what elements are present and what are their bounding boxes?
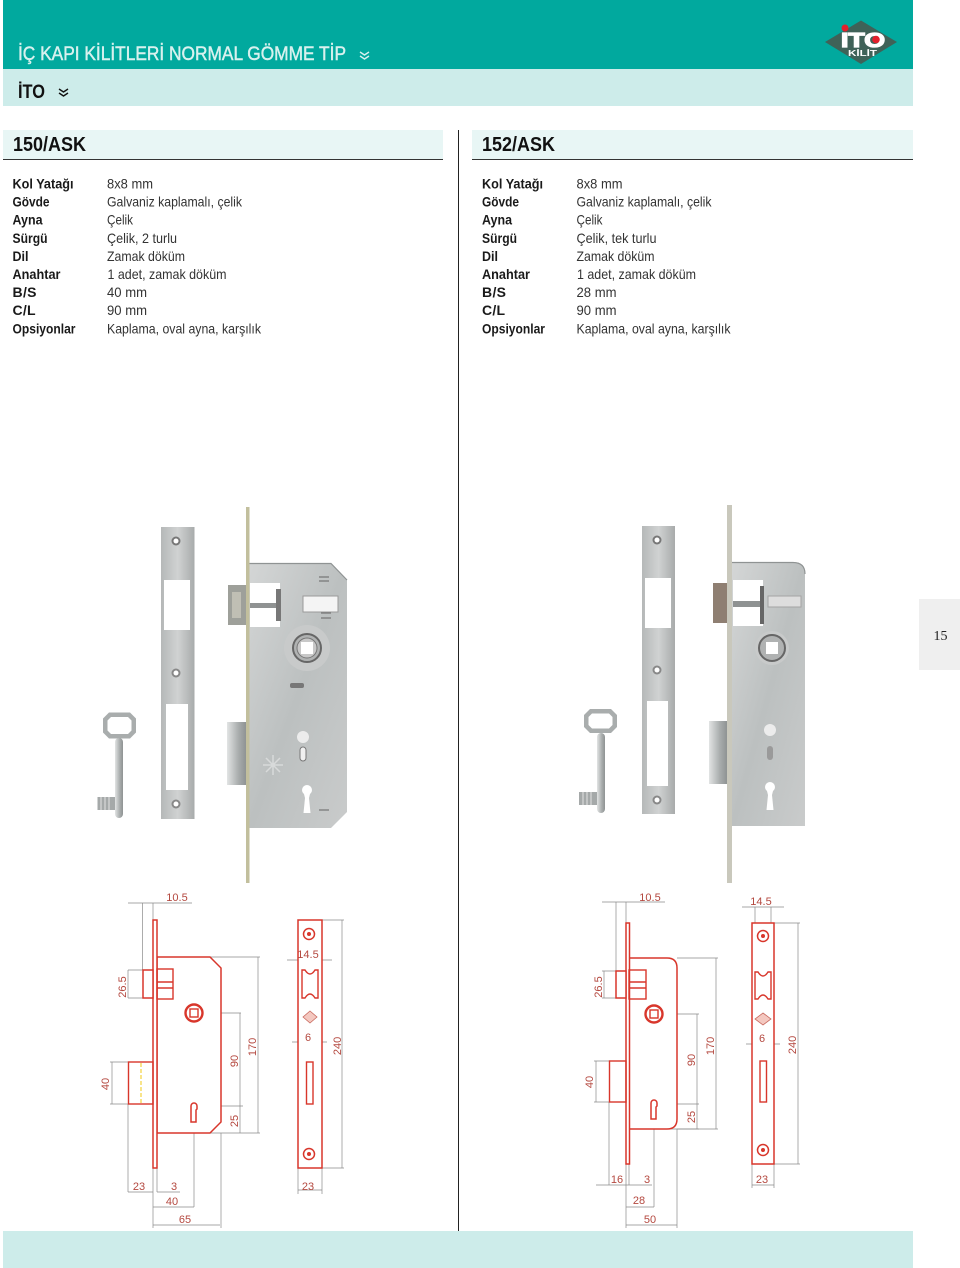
dimension labels (584, 892, 717, 1226)
technical drawing: 150/ASK strike plate: 6 (305, 1032, 311, 1044)
spec list: 150/ASK: Çelik, 2 turlu (107, 230, 177, 246)
page title: İÇ KAPI KİLİTLERİ NORMAL GÖMME TİP (18, 44, 346, 65)
photo: 152/ASK lock set (579, 505, 805, 883)
panel heading: 152/ASK: 152/ASK (482, 134, 555, 156)
dimension labels: 50 (644, 1214, 656, 1226)
spec list: 152/ASK: Dil (482, 248, 498, 264)
technical drawing: 152/ASK strike plate: 23 (756, 1174, 768, 1186)
spec list: 152/ASK: Sürgü (482, 230, 517, 246)
spec list: 150/ASK: Dil (12, 248, 28, 264)
panel heading: 150/ASK: 150/ASK (13, 134, 86, 156)
spec list: 152/ASK: Galvaniz kaplamalı, çelik (576, 194, 712, 210)
spec list: 152/ASK: Kol Yatağı (482, 176, 543, 192)
technical drawing: 150/ASK strike plate: 240 (332, 1037, 344, 1055)
dimension labels: 40 (100, 1078, 112, 1090)
spec list: 150/ASK: Çelik (107, 212, 134, 228)
header band (3, 0, 913, 69)
dimension labels: 40 (166, 1196, 178, 1208)
spec list: 152/ASK: B/S (482, 284, 506, 300)
spec list: 150/ASK: Kol Yatağı (12, 176, 74, 192)
spec list: 150/ASK: Gövde (12, 194, 50, 210)
spec list: 150/ASK: C/L (12, 302, 36, 318)
dimension lines (110, 903, 260, 1228)
spec list: 150/ASK: Ayna (12, 212, 43, 228)
dimension labels: 170 (247, 1038, 259, 1056)
dimension labels: 10.5 (166, 892, 188, 904)
spec list: 150/ASK: 1 adet, zamak döküm (108, 266, 226, 282)
lock outline (128, 920, 221, 1168)
technical drawing: 150/ASK strike plate: 23 (302, 1181, 314, 1193)
technical drawing: 152/ASK strike plate (742, 896, 800, 1188)
spec list: 152/ASK: 90 mm (576, 302, 616, 318)
spec list: 150/ASK: Anahtar (12, 266, 61, 282)
spec list: 150/ASK (12, 176, 262, 336)
logo: ITO Kilit: ITO (841, 30, 885, 52)
dimension labels: 3 (171, 1181, 177, 1193)
dimension labels: 23 (133, 1181, 145, 1193)
spec list: 150/ASK: Kaplama, oval ayna, karşılık (107, 320, 262, 336)
dimension labels: 3 (644, 1174, 650, 1186)
page number tab (919, 599, 960, 670)
dimension labels: 26.5 (593, 976, 605, 998)
dimension labels: 16 (611, 1174, 623, 1186)
technical drawing: 152/ASK lock (584, 892, 718, 1228)
dimension labels: 25 (686, 1111, 698, 1123)
spec list: 150/ASK: Sürgü (12, 230, 48, 246)
technical drawing: 150/ASK strike plate: 14.5 (297, 949, 319, 961)
technical drawing: 152/ASK strike plate: 240 (787, 1036, 799, 1054)
technical drawing: 152/ASK strike plate: 6 (759, 1033, 765, 1045)
photo: key (98, 712, 136, 818)
dimension labels: 65 (179, 1214, 191, 1226)
spec list: 152/ASK: 28 mm (576, 284, 616, 300)
spec list: 152/ASK: 8x8 mm (576, 176, 622, 192)
spec list: 150/ASK: 8x8 mm (107, 176, 153, 192)
spec list: 150/ASK: Galvaniz kaplamalı, çelik (107, 194, 243, 210)
photo: 150/ASK lock set (98, 507, 347, 883)
photo: strike plate (161, 527, 194, 819)
spec list: 152/ASK (482, 176, 731, 336)
photo: mortise lock body (227, 563, 347, 828)
brand band (3, 69, 913, 106)
spec list: 152/ASK: Zamak döküm (576, 248, 654, 264)
spec list: 152/ASK: C/L (482, 302, 505, 318)
dimension labels: 40 (584, 1076, 596, 1088)
dimension labels (100, 892, 259, 1226)
technical drawing: 150/ASK strike plate (287, 920, 344, 1194)
dimension labels: 10.5 (639, 892, 661, 904)
panel heading: 152/ASK (472, 130, 913, 160)
spec list: 152/ASK: Çelik, tek turlu (576, 230, 656, 246)
technical drawing: 150/ASK lock (100, 892, 260, 1228)
spec list: 150/ASK: 40 mm (107, 284, 147, 300)
spec list: 150/ASK: Opsiyonlar (12, 320, 76, 336)
page number tab: 15 (934, 629, 948, 644)
logo: ITO Kilit: KİLİT (848, 49, 877, 58)
dimension labels: 26.5 (117, 976, 129, 998)
spec list: 152/ASK: Çelik (576, 212, 603, 228)
spec list: 152/ASK: Gövde (482, 194, 519, 210)
photo: faceplate (246, 507, 250, 883)
dimension labels: 28 (633, 1195, 645, 1207)
dimension labels: 90 (229, 1055, 241, 1067)
panel heading: 150/ASK (3, 130, 443, 160)
brand name: İTO (18, 82, 45, 103)
technical drawing: 152/ASK strike plate: 14.5 (750, 896, 772, 908)
spec list: 150/ASK: 90 mm (107, 302, 147, 318)
icon: title chevrons (360, 52, 369, 59)
panel divider (458, 130, 459, 1231)
dimension labels: 170 (705, 1037, 717, 1055)
lock outline (610, 923, 677, 1164)
photo: key (579, 709, 617, 813)
spec list: 152/ASK: Opsiyonlar (482, 320, 545, 336)
photo: strike plate (642, 526, 675, 814)
spec list: 152/ASK: 1 adet, zamak döküm (577, 266, 696, 282)
spec list: 150/ASK: Zamak döküm (107, 248, 185, 264)
logo: ITO Kilit (825, 20, 897, 64)
icon: brand chevrons (59, 89, 68, 96)
spec list: 152/ASK: Anahtar (482, 266, 530, 282)
dimension labels: 25 (229, 1115, 241, 1127)
footer band (3, 1231, 913, 1268)
spec list: 152/ASK: Ayna (482, 212, 512, 228)
photo: mortise lock body (709, 562, 805, 826)
spec list: 152/ASK: Kaplama, oval ayna, karşılık (576, 320, 731, 336)
dimension labels: 90 (686, 1054, 698, 1066)
photo: faceplate (727, 505, 732, 883)
dimension lines (594, 902, 718, 1228)
spec list: 150/ASK: B/S (12, 284, 36, 300)
